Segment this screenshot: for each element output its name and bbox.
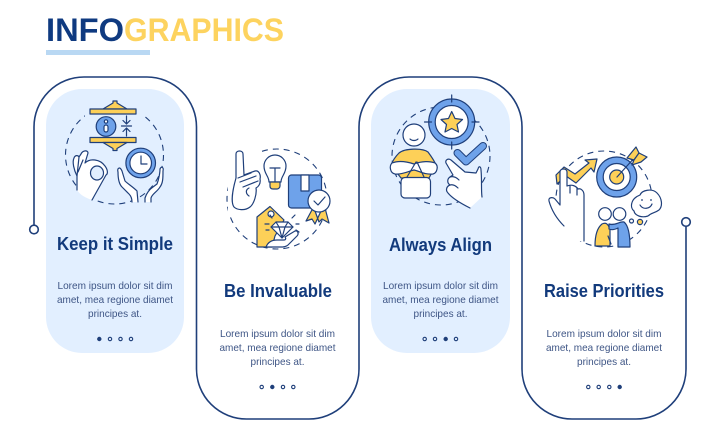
info circle (96, 117, 116, 136)
target (597, 157, 637, 197)
icon: raise priorities (549, 147, 661, 247)
target with star (424, 95, 479, 149)
open hand (266, 231, 298, 247)
pointing hand (446, 159, 482, 208)
body text: always align: principes at. (414, 308, 468, 320)
clock (126, 148, 156, 178)
body text: raise priorities: principes at. (577, 356, 631, 368)
rising arrow (556, 159, 597, 184)
box (288, 175, 322, 208)
tag hole (268, 211, 274, 217)
check mark fill (458, 146, 483, 162)
person (390, 124, 437, 178)
body text: raise priorities: amet, mea regione diamet (546, 342, 662, 354)
compress arrows (122, 116, 132, 136)
body text: keep it simple: Lorem ipsum dolor sit dim (58, 280, 173, 292)
title underline (46, 50, 150, 55)
title: INFO (46, 12, 124, 48)
light bulb (264, 155, 286, 189)
body text: raise priorities: Lorem ipsum dolor sit dim (546, 328, 662, 340)
ok hand outline (73, 151, 107, 200)
body text: be invaluable: Lorem ipsum dolor sit dim (220, 328, 335, 340)
body text: be invaluable (220, 328, 336, 368)
icon: be invaluable (227, 148, 330, 249)
pagination dots: step 4 (587, 385, 622, 389)
ok hand fingers (77, 157, 83, 176)
connecting outline (34, 77, 686, 419)
hand outline (549, 169, 584, 241)
pagination dots: step 1 (97, 337, 133, 341)
ribbon badge (306, 190, 330, 224)
body text: be invaluable: principes at. (250, 356, 304, 368)
panel background: always align (371, 89, 510, 353)
diamond (265, 215, 299, 238)
body text: always align: Lorem ipsum dolor sit dim (383, 280, 498, 292)
check mark (458, 146, 483, 162)
icon: always align (390, 95, 490, 208)
cupped hands (118, 168, 138, 202)
body text: keep it simple (57, 280, 173, 320)
body text: always align (382, 280, 499, 320)
thought cloud (632, 190, 661, 217)
pagination dots: step 3 (423, 337, 458, 341)
body text: keep it simple: principes at. (88, 308, 142, 320)
pointing hand details (238, 173, 258, 196)
connector node right (682, 218, 690, 226)
heading: always align: Always Align (389, 235, 492, 255)
hand details (450, 177, 459, 188)
pagination dots: step 2 (260, 385, 295, 389)
basket (401, 162, 430, 198)
heading: be invaluable: Be Invaluable (224, 281, 332, 301)
panel background: keep it simple (46, 89, 184, 353)
hand pointing up (549, 169, 584, 241)
connector node left (30, 225, 38, 234)
dart (617, 147, 647, 177)
title: GRAPHICS (124, 12, 284, 48)
heading: keep it simple: Keep it Simple (57, 234, 173, 254)
ok hand (73, 151, 107, 200)
pointing hand (232, 151, 260, 210)
price tag (257, 206, 284, 247)
hand details (570, 186, 577, 195)
top press plate (90, 101, 136, 114)
title (46, 12, 284, 48)
heading: raise priorities: Raise Priorities (544, 281, 664, 301)
pointing hand outline (446, 159, 482, 208)
body text: be invaluable: amet, mea regione diamet (220, 342, 336, 354)
body text: raise priorities (546, 328, 662, 368)
body text: always align: amet, mea regione diamet (382, 294, 499, 306)
two people (595, 208, 630, 247)
ok hand ring (90, 166, 104, 180)
thought dots (630, 219, 643, 225)
bottom press plate (90, 138, 136, 150)
body text: keep it simple: amet, mea regione diamet (57, 294, 173, 306)
icon: keep it simple (66, 100, 164, 204)
